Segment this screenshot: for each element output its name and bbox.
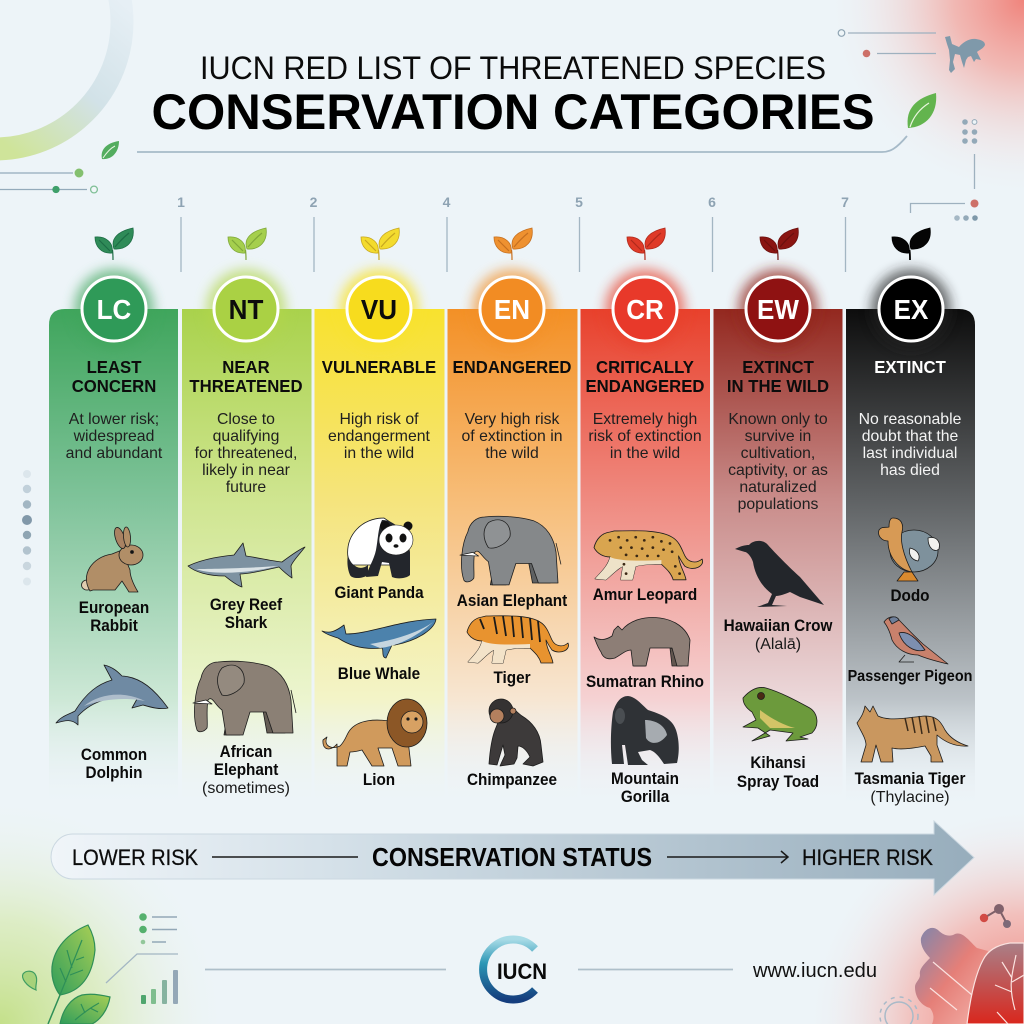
EW description: survive in bbox=[745, 428, 811, 445]
LC heading: LEAST bbox=[87, 356, 142, 377]
NT description: qualifying bbox=[213, 428, 279, 445]
icon: large leaf, top right bbox=[908, 93, 936, 128]
icon: EX sprout bbox=[892, 228, 930, 260]
icon: LC sprout bbox=[95, 228, 133, 260]
label: Kihansi Spray Toad: Spray Toad bbox=[737, 772, 819, 791]
animal: common dolphin bbox=[56, 665, 168, 725]
animal: Sumatran rhino bbox=[594, 618, 690, 666]
LC badge: LC bbox=[97, 294, 131, 325]
animal: passenger pigeon bbox=[884, 617, 948, 664]
title: CONSERVATION CATEGORIES bbox=[152, 84, 874, 140]
label: Giant Panda: Giant Panda bbox=[334, 583, 425, 602]
arrow: conservation status bbox=[51, 821, 974, 895]
circuit lines, top left bbox=[0, 169, 97, 193]
EN description: Very high risk bbox=[465, 411, 560, 428]
CR description bbox=[588, 411, 702, 462]
LC heading bbox=[72, 356, 156, 396]
label: higher risk: HIGHER RISK bbox=[802, 845, 933, 870]
column numbers and tick lines bbox=[177, 194, 849, 272]
label: Grey Reef Shark bbox=[210, 595, 283, 632]
icon: CR sprout bbox=[627, 228, 665, 260]
LC description: widespread bbox=[73, 428, 154, 445]
NT description: future bbox=[226, 479, 266, 496]
CR description: risk of extinction bbox=[588, 428, 702, 445]
CR badge: CR bbox=[626, 294, 664, 325]
panel: EX extinct bbox=[846, 228, 975, 810]
animal: Kihansi spray toad bbox=[743, 687, 817, 741]
CR heading: ENDANGERED bbox=[585, 375, 705, 396]
animal: chimpanzee bbox=[489, 699, 543, 766]
CR description: Extremely high bbox=[593, 411, 697, 428]
VU description: in the wild bbox=[344, 445, 414, 462]
animal: giant panda bbox=[347, 518, 413, 578]
footer divider left bbox=[205, 968, 446, 970]
EW description bbox=[728, 411, 828, 513]
CR badge bbox=[605, 269, 685, 349]
footer leaves, bottom left bbox=[23, 925, 110, 1024]
icon: EW sprout bbox=[760, 228, 798, 260]
animal: dodo bbox=[879, 518, 939, 581]
animal: Tasmanian tiger bbox=[857, 706, 968, 762]
column numbers and tick lines: 7 bbox=[841, 194, 849, 210]
IUCN logo: IUCN bbox=[497, 959, 547, 984]
panel: EW extinct in the wild bbox=[714, 228, 842, 810]
label: Grey Reef Shark: Shark bbox=[225, 613, 267, 632]
title underline with curve bbox=[137, 136, 907, 152]
CR heading bbox=[585, 356, 705, 396]
EW description: cultivation, bbox=[741, 445, 815, 462]
NT heading: THREATENED bbox=[189, 375, 303, 396]
NT heading bbox=[189, 356, 303, 396]
column numbers and tick lines: 6 bbox=[708, 194, 716, 210]
EX description: doubt that the bbox=[862, 428, 959, 445]
LC description: and abundant bbox=[66, 445, 163, 462]
column numbers and tick lines: 4 bbox=[443, 194, 451, 210]
label: Sumatran Rhino: Sumatran Rhino bbox=[586, 672, 704, 691]
EX description: No reasonable bbox=[859, 411, 962, 428]
panel: EN endangered bbox=[448, 228, 578, 810]
animal: mountain gorilla bbox=[611, 696, 679, 765]
label: Kihansi Spray Toad: Kihansi bbox=[750, 753, 806, 772]
icon: NT sprout bbox=[228, 228, 266, 260]
EX heading: EXTINCT bbox=[874, 356, 946, 377]
NT description: for threatened, bbox=[195, 445, 297, 462]
EX badge: EX bbox=[894, 294, 928, 325]
VU description: High risk of bbox=[339, 411, 419, 428]
EW heading: EXTINCT bbox=[742, 356, 814, 377]
EW badge bbox=[738, 269, 818, 349]
LC description: At lower risk; bbox=[69, 411, 159, 428]
EW heading: IN THE WILD bbox=[727, 375, 829, 396]
EX description: has died bbox=[880, 462, 940, 479]
label: Common Dolphin: Common bbox=[81, 745, 147, 764]
animal: blue whale bbox=[322, 619, 436, 658]
label: Asian Elephant: Asian Elephant bbox=[457, 591, 568, 610]
label: Common Dolphin: Dolphin bbox=[86, 763, 142, 782]
label: Passenger Pigeon: Passenger Pigeon bbox=[848, 667, 972, 685]
label: Mountain Gorilla: Gorilla bbox=[621, 787, 670, 806]
LC heading: CONCERN bbox=[72, 375, 156, 396]
dot grid and connector, right bbox=[910, 119, 978, 221]
decorative molecule and leaves, bottom right bbox=[880, 904, 1024, 1024]
panel: CR critically endangered bbox=[580, 228, 710, 810]
animal: Amur leopard bbox=[594, 531, 703, 580]
VU description bbox=[328, 411, 431, 462]
NT description: likely in near bbox=[202, 462, 290, 479]
CR heading: CRITICALLY bbox=[596, 356, 694, 377]
decorative arc, top left bbox=[0, 0, 122, 149]
animal: Hawaiian crow bbox=[735, 541, 824, 607]
label: Chimpanzee: Chimpanzee bbox=[467, 770, 557, 789]
website url: www.iucn.edu bbox=[752, 960, 877, 982]
VU badge bbox=[339, 269, 419, 349]
EW description: populations bbox=[738, 496, 819, 513]
icon: small leaf, top left bbox=[102, 141, 119, 159]
VU heading: VULNERABLE bbox=[322, 356, 436, 377]
label: Kihansi Spray Toad bbox=[737, 753, 819, 791]
label: European Rabbit bbox=[79, 598, 149, 635]
VU description: endangerment bbox=[328, 428, 431, 445]
icon: EN sprout bbox=[494, 228, 532, 260]
column numbers and tick lines: 5 bbox=[575, 194, 583, 210]
label: Lion: Lion bbox=[363, 770, 395, 789]
label: Common Dolphin bbox=[81, 745, 147, 782]
EN description: of extinction in bbox=[462, 428, 562, 445]
label: Amur Leopard: Amur Leopard bbox=[593, 585, 697, 604]
animal: African elephant bbox=[193, 661, 296, 735]
animal: grey reef shark bbox=[188, 543, 305, 587]
label: African Elephant (sometimes) bbox=[202, 742, 290, 797]
EN heading: ENDANGERED bbox=[452, 356, 572, 377]
label: African Elephant (sometimes): Elephant bbox=[214, 760, 279, 779]
LC description bbox=[66, 411, 163, 462]
column numbers and tick lines: 2 bbox=[310, 194, 318, 210]
NT badge: NT bbox=[229, 294, 264, 325]
column numbers and tick lines: 1 bbox=[177, 194, 185, 210]
dot scale, left bbox=[22, 470, 32, 586]
CR description: in the wild bbox=[610, 445, 680, 462]
animal: tiger bbox=[467, 616, 569, 663]
EN badge bbox=[472, 269, 552, 349]
EW description: naturalized bbox=[739, 479, 817, 496]
EX description: last individual bbox=[863, 445, 957, 462]
animal: Asian elephant bbox=[460, 516, 561, 585]
EW description: captivity, or as bbox=[728, 462, 828, 479]
NT heading: NEAR bbox=[222, 356, 270, 377]
NT description bbox=[195, 411, 297, 496]
label: Dodo: Dodo bbox=[890, 586, 930, 605]
panel: VU vulnerable bbox=[314, 228, 444, 810]
label: Tasmania Tiger (Thylacine): Tasmania Tiger bbox=[855, 769, 966, 788]
NT badge bbox=[206, 269, 286, 349]
label: Grey Reef Shark: Grey Reef bbox=[210, 595, 283, 614]
EN description: the wild bbox=[485, 445, 539, 462]
label: Blue Whale: Blue Whale bbox=[338, 664, 420, 683]
label: European Rabbit: Rabbit bbox=[90, 616, 138, 635]
EN badge: EN bbox=[494, 294, 530, 325]
VU badge: VU bbox=[361, 294, 397, 325]
label: Tasmania Tiger (Thylacine): (Thylacine) bbox=[870, 789, 950, 806]
footer divider right bbox=[578, 968, 733, 970]
animal: lion bbox=[323, 699, 427, 766]
label: Mountain Gorilla bbox=[611, 769, 679, 806]
label: African Elephant (sometimes): (sometimes) bbox=[202, 780, 290, 797]
EW heading bbox=[727, 356, 829, 396]
IUCN logo bbox=[483, 940, 547, 999]
label: Hawaiian Crow (Alalā): Hawaiian Crow bbox=[724, 616, 833, 635]
LC badge bbox=[74, 269, 154, 349]
EN description bbox=[462, 411, 562, 462]
NT description: Close to bbox=[217, 411, 275, 428]
mini chart and list icons bbox=[106, 913, 178, 1004]
label: Hawaiian Crow (Alalā): (Alalā) bbox=[755, 636, 801, 653]
EX description bbox=[859, 411, 962, 479]
title bbox=[152, 50, 874, 140]
EW description: Known only to bbox=[728, 411, 828, 428]
label: African Elephant (sometimes): African bbox=[220, 742, 272, 761]
label: Mountain Gorilla: Mountain bbox=[611, 769, 679, 788]
label: European Rabbit: European bbox=[79, 598, 149, 617]
EW badge: EW bbox=[757, 294, 799, 325]
label: Hawaiian Crow (Alalā) bbox=[724, 616, 833, 653]
label: conservation status: CONSERVATION STATUS bbox=[372, 842, 652, 872]
panel: LC least concern bbox=[49, 228, 178, 810]
circuit lines and frog silhouette, top right bbox=[838, 30, 985, 73]
animal: European rabbit bbox=[82, 526, 143, 592]
label: Tasmania Tiger (Thylacine) bbox=[855, 769, 966, 806]
icon: VU sprout bbox=[361, 228, 399, 260]
title: IUCN RED LIST OF THREATENED SPECIES bbox=[200, 50, 826, 86]
EX badge bbox=[871, 269, 951, 349]
label: Tiger: Tiger bbox=[493, 668, 531, 687]
panel: NT near threatened bbox=[182, 228, 312, 810]
label: lower risk: LOWER RISK bbox=[72, 845, 198, 870]
